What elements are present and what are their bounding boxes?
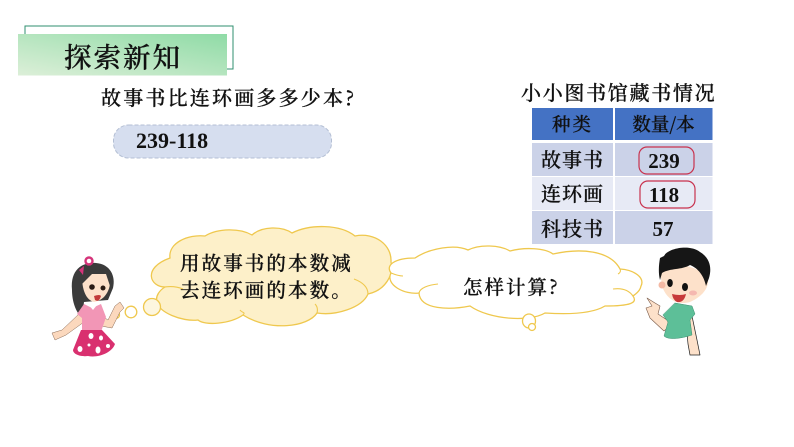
shirt	[663, 303, 695, 339]
right arm	[686, 316, 700, 355]
eyes	[667, 279, 673, 287]
data table	[532, 108, 712, 244]
row: 故事书 239: 239	[648, 149, 680, 173]
cheek	[689, 290, 697, 296]
row: 连环画 118	[532, 177, 712, 210]
table header: 种类	[552, 111, 593, 137]
mouth	[672, 294, 686, 302]
shirt	[77, 304, 106, 332]
table header: 数量/本	[632, 111, 695, 137]
face	[82, 272, 110, 302]
skirt dots	[78, 333, 110, 354]
row: 连环画 118: 连环画	[541, 178, 604, 207]
face	[660, 265, 708, 303]
row: 故事书 239	[532, 143, 712, 176]
title banner: 探索新知	[64, 35, 182, 75]
row: 科技书 57: 57	[652, 217, 674, 241]
thought cloud: boy: 怎样计算?	[463, 272, 560, 300]
character: boy	[646, 248, 710, 355]
skirt	[73, 330, 115, 356]
table title: 小小图书馆藏书情况	[521, 77, 716, 106]
character: girl	[52, 258, 124, 356]
row: 科技书 57: 科技书	[541, 213, 604, 242]
thought bubbles: boy	[522, 314, 536, 330]
left arm	[646, 298, 670, 331]
row: 科技书 57	[532, 211, 712, 244]
thought bubbles: girl	[112, 298, 160, 318]
thought cloud: boy	[389, 246, 642, 330]
bow	[86, 258, 92, 264]
formula pill: 239-118	[136, 128, 208, 153]
arms	[52, 313, 84, 340]
fringe	[78, 269, 112, 286]
question text: 故事书比连环画多多少本?	[101, 82, 356, 111]
ear	[658, 282, 666, 288]
row: 故事书 239: 故事书	[541, 144, 604, 173]
hair back	[72, 263, 114, 318]
thought cloud: girl: 用故事书的本数减	[180, 248, 353, 276]
thought cloud: girl: 去连环画的本数。	[180, 275, 353, 303]
title banner	[18, 26, 233, 76]
hair	[659, 248, 710, 286]
row: 连环画 118: 118	[649, 183, 679, 207]
thought cloud: girl	[112, 227, 392, 326]
table header	[532, 108, 712, 140]
formula pill	[114, 125, 332, 158]
eyes and mouth	[89, 284, 95, 290]
